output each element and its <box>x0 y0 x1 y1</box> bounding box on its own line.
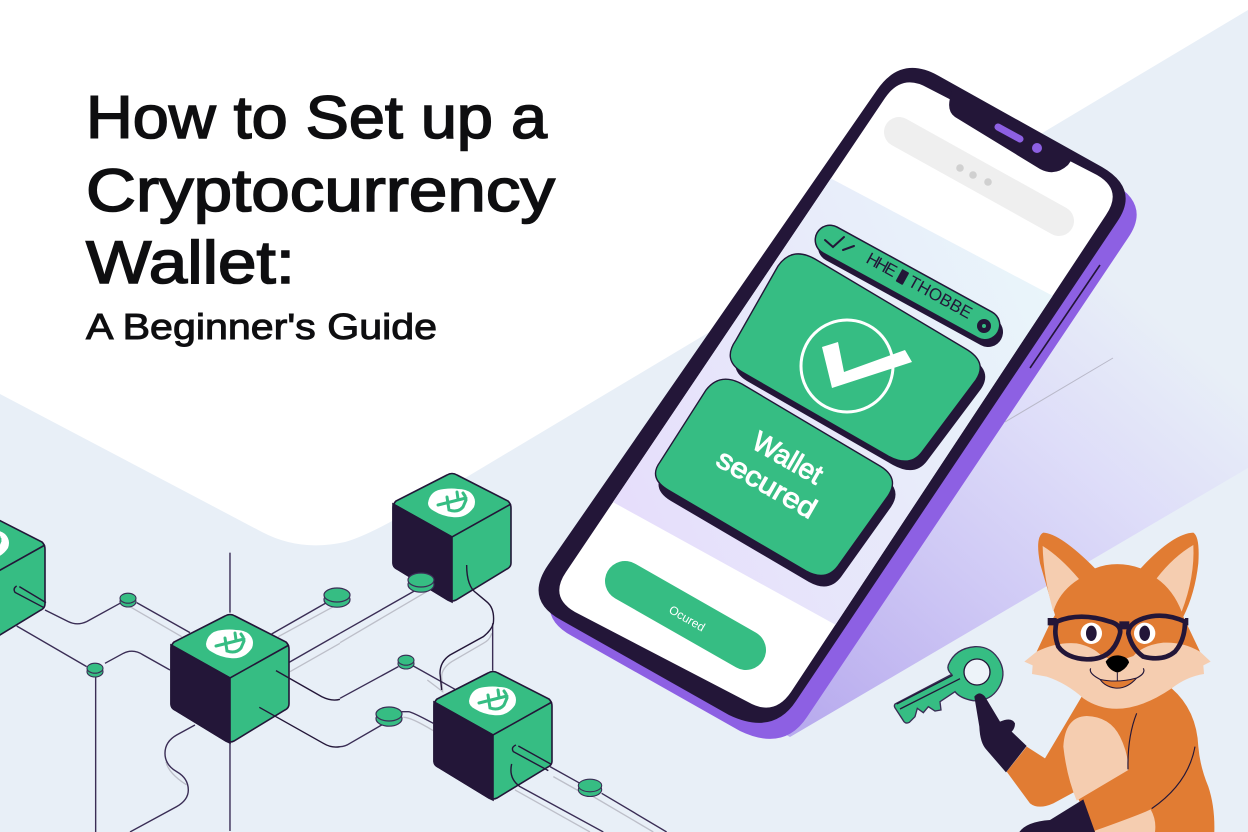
notch <box>945 82 1085 172</box>
cube: center <box>171 614 289 743</box>
title: Cryptocurrency <box>86 157 555 224</box>
check icon <box>801 320 912 412</box>
button: Ocured <box>666 603 708 634</box>
network nodes <box>87 573 602 796</box>
subtitle: A Beginner's Guide <box>86 306 437 347</box>
button <box>625 581 746 650</box>
nose and mouth <box>1090 655 1144 688</box>
title: Wallet: <box>86 229 295 296</box>
network lines <box>17 553 667 832</box>
tag text: HHE <box>863 249 900 281</box>
status tag <box>825 237 991 333</box>
speaker and camera <box>998 127 1042 153</box>
phone frame <box>539 68 1126 723</box>
right ear inner <box>1157 545 1194 612</box>
wallet secured text: Wallet <box>747 425 829 490</box>
screen band <box>600 178 1070 630</box>
lower belly <box>1095 809 1155 832</box>
tag text <box>863 249 975 323</box>
cube wires on faces <box>14 565 551 787</box>
raised glove <box>974 693 1027 772</box>
phone <box>539 68 1137 739</box>
body <box>1007 688 1214 832</box>
side button lines <box>1030 265 1100 368</box>
glasses <box>1048 616 1188 659</box>
phone shadow <box>760 225 1248 737</box>
lower glove <box>1019 799 1095 832</box>
wallet secured text: secured <box>711 443 822 525</box>
upper card: check <box>730 254 985 470</box>
title <box>86 84 555 296</box>
fox mascot <box>894 533 1214 832</box>
belly <box>1063 716 1128 801</box>
head <box>1037 533 1200 677</box>
phone screen <box>559 82 1113 708</box>
search bar <box>899 132 1059 221</box>
eyes <box>1081 623 1155 644</box>
wallet secured text <box>711 425 829 525</box>
lower card: wallet secured <box>656 379 896 586</box>
cube: lower <box>434 672 552 800</box>
cube: top <box>393 474 511 602</box>
tag text: THOBBE <box>905 272 975 323</box>
muzzle and cheeks <box>1024 643 1211 709</box>
key <box>894 647 1003 723</box>
left ear inner <box>1043 546 1079 612</box>
body lines <box>1128 713 1195 809</box>
title: How to Set up a <box>86 84 548 151</box>
cube: left <box>0 514 45 643</box>
phone purple edge <box>550 84 1137 739</box>
